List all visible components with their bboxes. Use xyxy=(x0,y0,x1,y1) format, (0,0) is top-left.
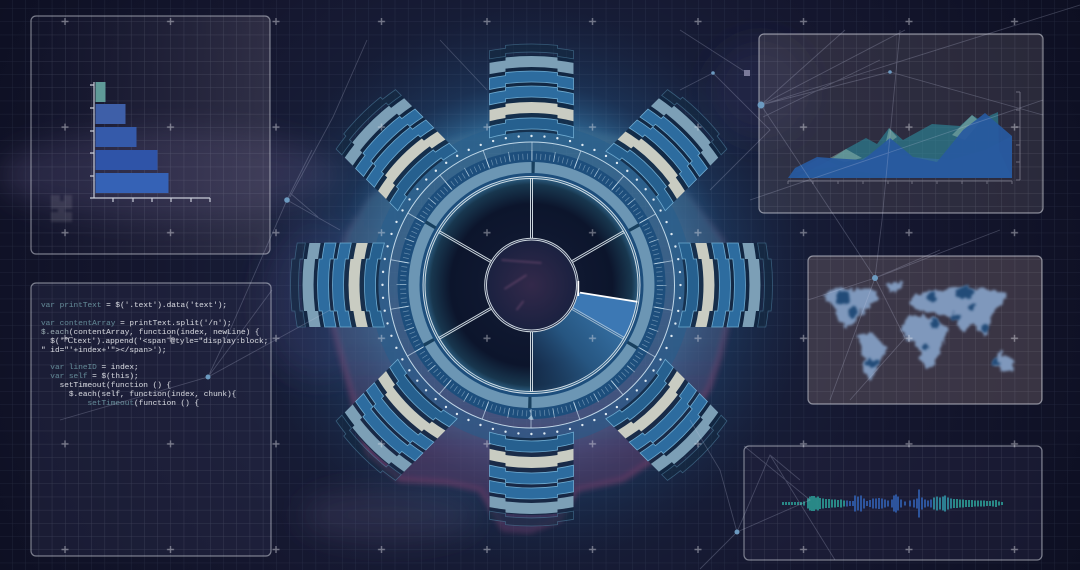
highlighted sector xyxy=(572,292,637,338)
axes xyxy=(90,82,210,202)
code text: " id="'+index+'"></span>'); xyxy=(41,347,167,355)
spoke: top xyxy=(490,44,574,138)
spoke: right xyxy=(679,243,773,327)
heart streaks xyxy=(502,260,542,310)
continents xyxy=(823,282,1015,382)
code text: var self = $(this); xyxy=(50,373,139,381)
map dark patches xyxy=(836,287,999,366)
inner disc xyxy=(424,177,640,393)
spoke: left xyxy=(290,243,384,327)
light ring xyxy=(414,168,649,402)
wave bars xyxy=(783,490,1002,518)
code text: var lineID = index; xyxy=(50,364,139,372)
outer ring lines xyxy=(388,142,674,428)
code text: var printText = $('.text').data('text'); xyxy=(41,302,227,310)
dots ring band xyxy=(380,133,684,437)
axes xyxy=(788,92,1020,184)
code text xyxy=(41,302,268,408)
central glow xyxy=(251,5,811,565)
brain silhouette xyxy=(333,122,729,532)
spoke: bottom xyxy=(490,432,574,526)
panel: bar chart xyxy=(31,16,270,254)
code text: $.each(contentArray, function(index, newLine) { xyxy=(41,329,260,337)
spoke: bottom right xyxy=(606,359,732,485)
hub xyxy=(486,239,578,331)
bars xyxy=(96,82,168,193)
HUD dial xyxy=(290,44,773,526)
spoke: top left xyxy=(331,85,457,211)
code text: setTimeout(function () { xyxy=(60,382,172,390)
background nebula clouds xyxy=(0,40,810,543)
panel: area chart xyxy=(759,34,1043,213)
dot ring xyxy=(382,136,680,434)
dial dividers xyxy=(423,176,640,394)
fading sector xyxy=(532,308,624,392)
ring gaps xyxy=(414,168,649,402)
panel: code xyxy=(31,283,271,556)
value pointer xyxy=(578,281,638,302)
spoke: top right xyxy=(606,85,732,211)
panel: waveform xyxy=(744,446,1042,560)
panel: world map xyxy=(808,256,1042,404)
code text: $('℃text').append('<span @tyle="display:block; xyxy=(50,337,268,346)
code text: var contentArray = printText.split('/n'); xyxy=(41,320,232,328)
tick ring band xyxy=(398,151,666,419)
network nodes xyxy=(206,70,892,534)
code text: $.each(self, function(index, chunk){ xyxy=(69,391,237,399)
area series xyxy=(788,112,1012,178)
code text: setTimeout(function () { xyxy=(88,400,199,408)
pixel smudge xyxy=(51,195,72,222)
spoke: bottom left xyxy=(331,359,457,485)
